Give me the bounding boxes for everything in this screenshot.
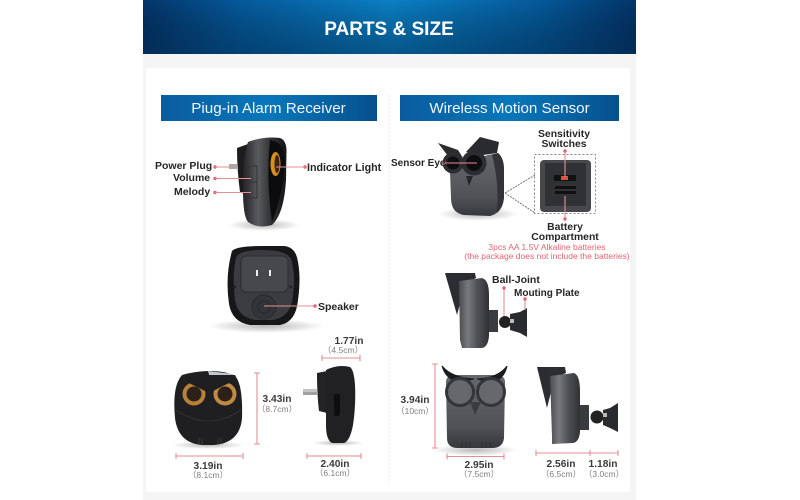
dimension: 2.56in: （6.5cm） bbox=[541, 469, 581, 479]
sensor owl front view bbox=[433, 366, 517, 456]
sensor dimensions bbox=[396, 364, 624, 479]
label: Ball-Joint: Ball-Joint bbox=[492, 274, 540, 286]
dimension: 1.77in bbox=[322, 336, 363, 361]
dimension: 2.56in: 2.56in bbox=[547, 459, 575, 470]
dimension: 3.43in: 3.43in bbox=[263, 394, 291, 405]
label: Melody: Melody bbox=[174, 186, 210, 198]
dimension: 2.40in: （6.1cm） bbox=[315, 468, 355, 478]
label: Melody bbox=[174, 186, 251, 198]
heading: Plug-in Alarm Receiver: Piug-in Alarm Receiver bbox=[191, 100, 346, 117]
dimension: 3.43in: （8.7cm） bbox=[257, 404, 297, 414]
dimension: 2.56in bbox=[536, 450, 590, 479]
title banner bbox=[143, 0, 636, 54]
label: Volume: Volume bbox=[173, 172, 210, 184]
label: Volume bbox=[173, 172, 251, 184]
label: Power Plug: Power Plug bbox=[155, 160, 212, 172]
dimension: 3.94in bbox=[396, 364, 438, 448]
receiver side view with labels bbox=[155, 138, 382, 231]
white content panel bbox=[146, 68, 630, 492]
dimension: 3.19in: （8.1cm） bbox=[188, 470, 228, 480]
label: Battery Compartment: Battery bbox=[547, 222, 583, 233]
sensor side size view bbox=[537, 367, 618, 444]
label: Sensitivity Switches: Sensitivity bbox=[538, 129, 590, 140]
dimension: 1.77in: 1.77in bbox=[335, 336, 363, 347]
dimension: 3.94in: （10cm） bbox=[396, 406, 434, 416]
panel divider bbox=[388, 95, 390, 484]
sensor side view with mount labels bbox=[445, 273, 580, 348]
dimension: 1.18in: （3.0cm） bbox=[584, 469, 624, 479]
dimension: 2.40in: 2.40in bbox=[321, 459, 349, 470]
note: batteries: (the package does not include the batteries) bbox=[464, 251, 630, 261]
note: batteries: 3pcs AA 1.5V Alkaline batteries bbox=[488, 242, 606, 252]
heading: Wireless Motion Sensor bbox=[400, 95, 619, 121]
dimension: 2.95in bbox=[447, 454, 504, 479]
dimension: 3.94in: 3.94in bbox=[401, 395, 429, 406]
label: Battery Compartment: Compartment bbox=[531, 232, 599, 243]
page backdrop bbox=[143, 54, 636, 500]
label: Indicator Light: Indicator Light bbox=[307, 162, 382, 174]
label: Speaker: Speaker bbox=[318, 301, 359, 313]
label: Sensor Eye: Sensor Eye bbox=[391, 158, 446, 169]
dimension: 2.40in bbox=[307, 453, 361, 478]
title banner: PARTS & SIZE bbox=[324, 19, 454, 40]
receiver side size view bbox=[303, 366, 364, 446]
receiver front view bbox=[172, 371, 244, 449]
heading: Wireless Motion Sensor: Wireless Motion Sensor bbox=[429, 100, 590, 117]
receiver dimensions bbox=[176, 336, 363, 480]
sensitivity switches and battery inset bbox=[464, 129, 630, 261]
sensor front-angle view with Sensor Eye label bbox=[391, 137, 518, 221]
dimension: 3.19in: 3.19in bbox=[194, 461, 222, 472]
receiver back view with speaker label bbox=[208, 246, 359, 333]
dimension: 3.43in bbox=[254, 373, 297, 444]
dimension: 1.77in: （4.5cm） bbox=[323, 345, 363, 355]
dimension: 2.95in: （7.5cm） bbox=[459, 469, 499, 479]
dimension: 1.18in: 1.18in bbox=[589, 459, 617, 470]
label: Sensitivity Switches: Switches bbox=[541, 139, 587, 150]
dimension: 3.19in bbox=[176, 453, 243, 480]
dimension: 1.18in bbox=[584, 450, 624, 479]
heading: Plug-in Alarm Receiver bbox=[161, 95, 377, 121]
label: Mounting Plate: Mouting Plate bbox=[514, 288, 580, 299]
dimension: 2.95in: 2.95in bbox=[465, 460, 493, 471]
